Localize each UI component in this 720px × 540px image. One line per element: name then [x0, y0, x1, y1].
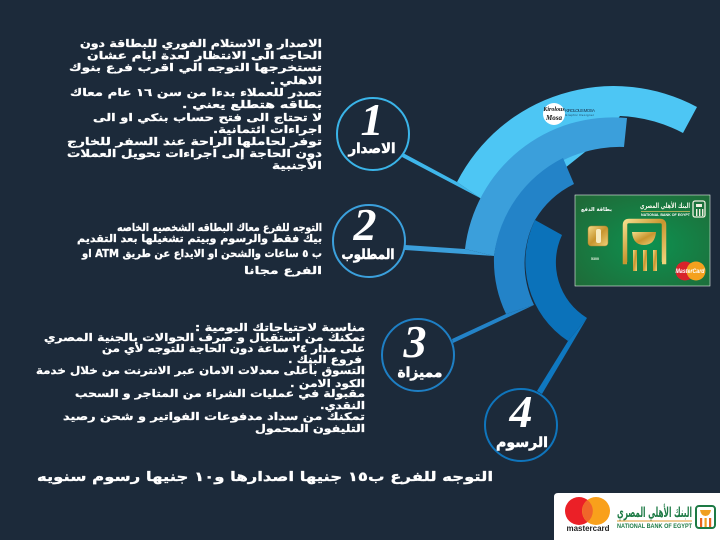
text block: issuance: دون الحاجة إلى اجراءات تحويل العملات — [67, 148, 323, 160]
bank card image: NATIONAL BANK OF EGYPT — [641, 212, 691, 217]
text block: features: التليفون المحمول — [255, 423, 365, 435]
circle 4: fees: 4 — [508, 386, 532, 437]
text block: issuance: اجراءات ائتمانية. — [213, 124, 322, 136]
bank card image: بطاقة الدفع — [581, 207, 612, 213]
arc segment 3 — [494, 158, 574, 314]
arc segment 1 — [457, 86, 697, 220]
watermark logo: Kirolous — [542, 107, 565, 113]
text block: issuance — [67, 38, 323, 172]
arc segment 2 — [465, 117, 627, 256]
circle 3: features: مميزاة — [398, 365, 442, 381]
text block: features: تمكنك من استقبال و صرف الحوالات بالجنية المصري — [44, 332, 365, 344]
text block: issuance: بطاقه هتطلع يعني . — [182, 99, 322, 111]
text block: requirements: الفرع مجانا — [244, 265, 322, 277]
text block: features: مناسبة لاحتياجاتك اليومية : — [195, 322, 365, 334]
text block: issuance: تصدر للعملاء بدءا من سن ١٦ عام معاك — [70, 87, 322, 99]
circle 3: features — [382, 316, 454, 391]
bank card image: البنك الأهلي المصري — [640, 201, 690, 210]
national bank of egypt logo — [617, 504, 715, 530]
circle 4: fees — [485, 386, 557, 461]
connector line 2 — [405, 245, 494, 256]
text block: features: على مدار ٢٤ ساعة دون الحاجة للتوجه لأي من — [102, 342, 365, 355]
circle 1: issuance: 1 — [360, 94, 384, 145]
text block: features: مقبولة في عمليات الشراء من المتاجر و السحب — [75, 388, 365, 400]
arc segment 4 — [525, 220, 587, 341]
watermark logo: KIROLOUS MOSA — [565, 108, 595, 113]
footer note: fees: التوجه للفرع ب١٥ جنيها اصدارها و١٠ جنيها رسوم سنويه — [37, 470, 493, 485]
text block: features: التسوق بأعلى معدلات الامان عبر الانترنت من خلال خدمة — [36, 363, 365, 377]
connector line 1 — [402, 153, 480, 198]
circle 1: issuance: الاصدار — [348, 141, 396, 157]
mastercard logo — [565, 497, 610, 533]
text block: features: الكود الامن . — [290, 378, 365, 390]
text block: requirements: ب ٥ ساعات والشحن او الايداع عن طريق ATM او — [81, 248, 322, 260]
text block: features: النقدي. — [320, 400, 365, 412]
text block: issuance: لا تحتاج الى فتح حساب بنكي او الى — [93, 112, 322, 124]
text block: features: فروع البنك . — [288, 354, 362, 366]
text block: issuance: توفر لحاملها الراحة عند السفر للخارج — [67, 136, 322, 148]
circle 2: requirements: 2 — [352, 199, 376, 250]
watermark logo: Mosa — [545, 114, 562, 122]
text block: issuance: تستخرجها التوجه الي اقرب فرع بنوك — [69, 62, 322, 74]
text block: issuance: الأجنبية — [272, 159, 322, 172]
text block: features — [36, 322, 365, 435]
circle 2: requirements — [333, 199, 405, 277]
text block: requirements: التوجه للفرع معاك البطاقه الشخصيه الخاصه — [117, 222, 322, 234]
connector line 4 — [537, 318, 587, 394]
text block: issuance: الاصدار و الاستلام الفوري للبطاقة دون — [80, 38, 322, 50]
text block: issuance: الحاجه الى الانتظار لعدة ايام عشان — [87, 50, 322, 62]
mastercard logo: mastercard — [566, 524, 610, 533]
logo panel — [554, 493, 720, 540]
watermark logo: Graphic Designer — [565, 113, 594, 117]
bank card image: 5300 — [591, 257, 599, 261]
circle 2: requirements: المطلوب — [342, 247, 394, 263]
text block: issuance: الاهلي . — [270, 75, 322, 87]
circle 4: fees: الرسوم — [496, 435, 548, 451]
text block: requirements: بيك فقط والرسوم وبيتم تشغيلها بعد التقديم — [77, 233, 322, 245]
connector line 3 — [452, 305, 534, 343]
circle 1: issuance — [337, 94, 409, 170]
text block: requirements — [77, 222, 322, 277]
text block: features: تمكنك من سداد مدفوعات الفواتير و شحن رصيد — [63, 411, 365, 423]
national bank of egypt logo: NATIONAL BANK OF EGYPT — [617, 523, 692, 530]
bank card image: MasterCard — [676, 269, 705, 275]
bank card image — [575, 195, 710, 286]
watermark logo — [542, 103, 595, 125]
circle 3: features: 3 — [402, 316, 426, 367]
